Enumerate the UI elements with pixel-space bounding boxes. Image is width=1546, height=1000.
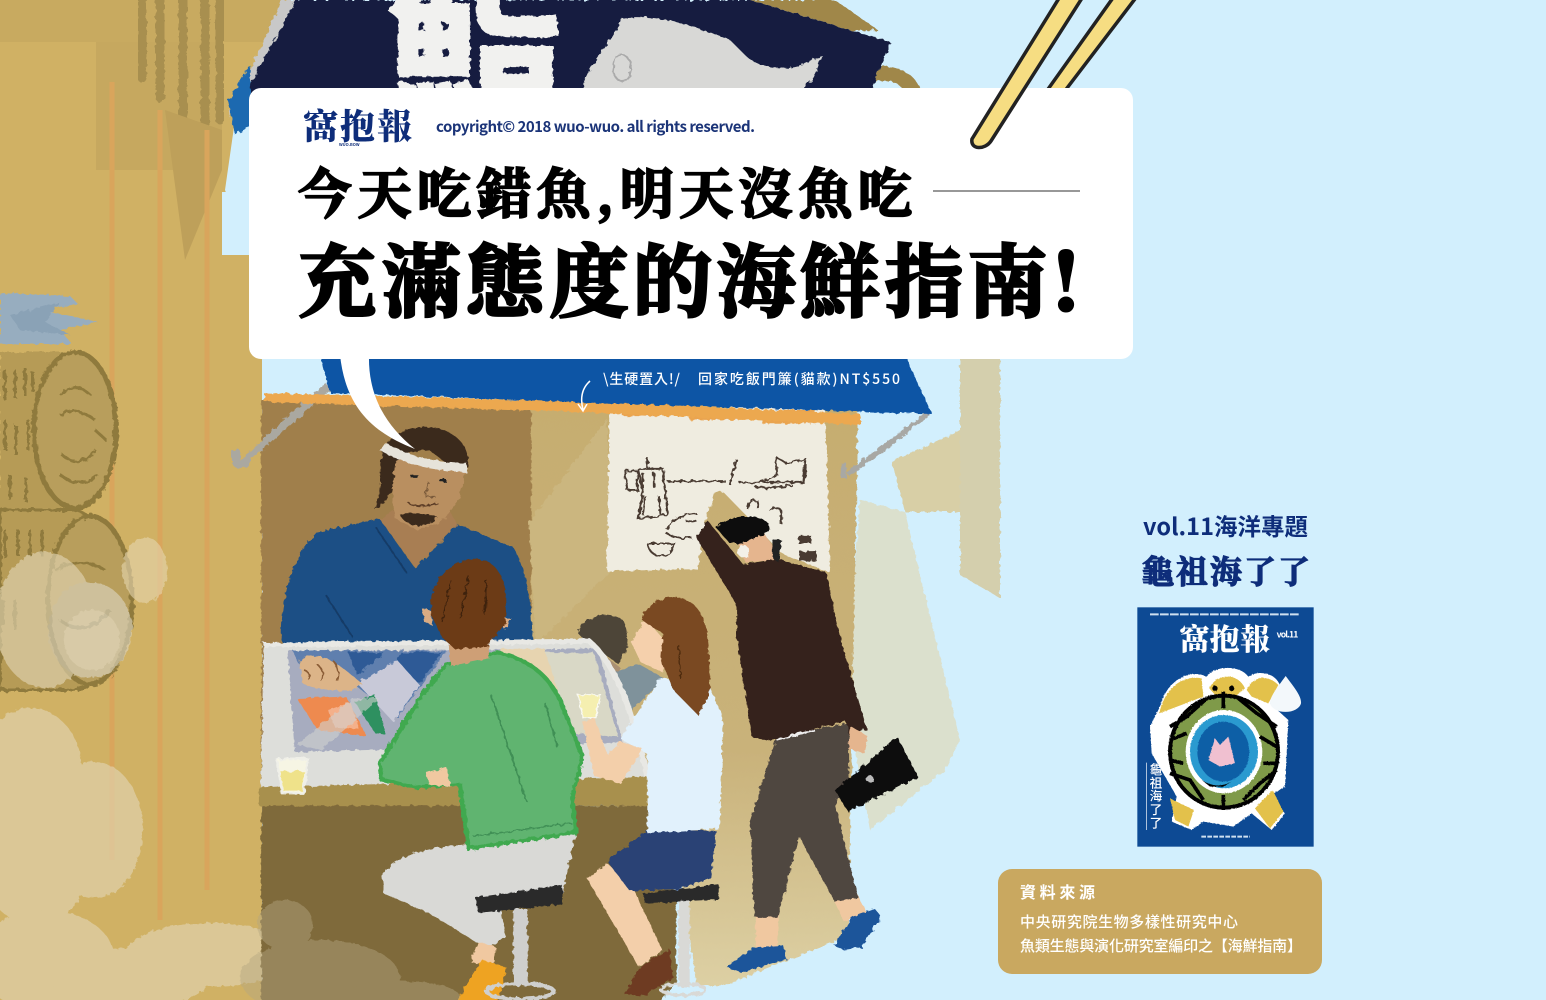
cover vertical title: 了 xyxy=(1150,812,1162,831)
steam over shop xyxy=(240,900,460,1000)
display case xyxy=(261,641,647,787)
cover vertical title: 祖 xyxy=(1150,772,1163,791)
stools xyxy=(475,884,719,999)
curtain drawings xyxy=(625,457,806,556)
awning struts xyxy=(844,413,929,478)
sign fish xyxy=(582,17,822,92)
shop scene xyxy=(259,400,929,1000)
barrels xyxy=(0,352,132,690)
wall notch xyxy=(222,192,250,255)
awning caption xyxy=(578,369,900,411)
wall stripes xyxy=(112,82,207,920)
chopstick rear xyxy=(1046,0,1138,92)
caption arrow xyxy=(578,381,590,411)
man in green xyxy=(379,559,583,1000)
cover vertical title: 龜 xyxy=(1150,759,1163,778)
awning caption: 回家吃飯門簾(貓款)NT$550 xyxy=(698,369,900,389)
bubble tail xyxy=(340,355,415,449)
cover vertical title: 了 xyxy=(1150,799,1162,818)
cover vertical title: 海 xyxy=(1150,786,1163,805)
source box xyxy=(998,869,1322,974)
man in black xyxy=(696,516,918,973)
sign banner xyxy=(228,0,922,135)
awning caption: \生硬置入!/ xyxy=(603,369,681,389)
bubble card xyxy=(249,88,1133,359)
chef xyxy=(280,426,534,644)
cover top line xyxy=(1150,611,1300,617)
heading line two: 充滿態度的海鮮指南! xyxy=(298,219,1080,333)
cover volume: vol.11 xyxy=(1277,628,1298,640)
wall drips xyxy=(142,0,220,130)
cover masthead: 窩抱報 xyxy=(1179,615,1270,659)
counter front xyxy=(261,806,676,1000)
cover badge xyxy=(1270,676,1301,712)
heading line one: 今天吃錯魚,明天沒魚吃 xyxy=(298,152,912,229)
volume title xyxy=(1142,508,1310,593)
background building shadows xyxy=(845,358,1000,830)
back customer xyxy=(578,615,663,714)
counter top xyxy=(259,777,647,806)
shop back wall xyxy=(261,400,536,821)
logo: WUO.BOW xyxy=(339,142,360,148)
woman xyxy=(578,597,723,996)
chopstick front xyxy=(972,0,1084,148)
logo: 窩抱報 xyxy=(303,100,412,150)
cover vertical title xyxy=(1147,759,1163,831)
magazine cover xyxy=(1137,607,1314,847)
counter glass xyxy=(277,759,308,793)
turtle illustration xyxy=(1150,668,1288,830)
copyright: copyright© 2018 wuo-wuo. all rights reserved. xyxy=(436,116,755,137)
noren curtain xyxy=(607,408,830,573)
dried fish on barrels xyxy=(0,293,98,344)
volume title: 龜祖海了了 xyxy=(1142,547,1310,593)
source text: 魚類生態與演化研究室編印之【海鮮指南】 xyxy=(1020,935,1302,956)
volume title: vol.11海洋專題 xyxy=(1143,508,1308,542)
speech bubble xyxy=(249,88,1133,449)
source text: 中央研究院生物多樣性研究中心 xyxy=(1020,911,1238,932)
heading rule xyxy=(933,190,1080,192)
cover bottom line xyxy=(1201,834,1250,840)
left strut xyxy=(236,386,328,465)
steam clouds xyxy=(0,537,295,1000)
source heading: 資料來源 xyxy=(1020,879,1095,903)
shop side wall xyxy=(531,400,858,986)
left wall xyxy=(0,0,290,1000)
awning xyxy=(264,355,932,425)
